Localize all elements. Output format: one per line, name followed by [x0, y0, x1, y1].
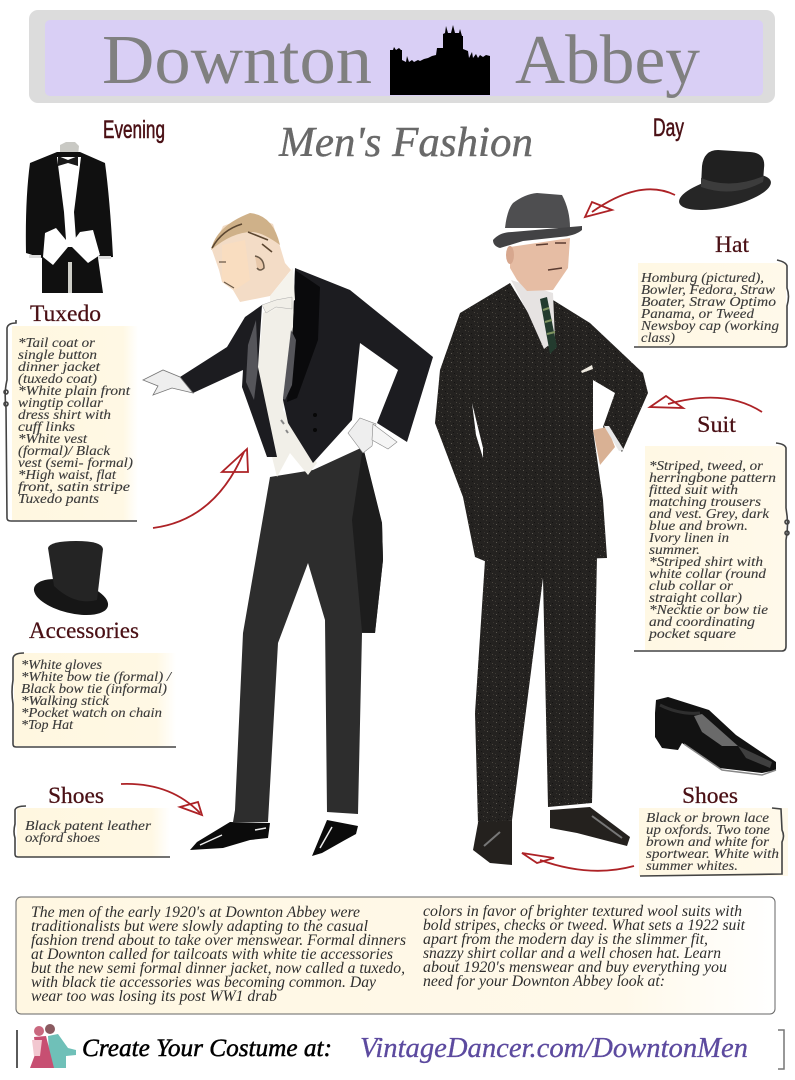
- panel: hat: Homburg (pictured),: [640, 271, 764, 286]
- panel: day shoes: brown and white for: [646, 835, 770, 850]
- panel: accessories: [12, 618, 176, 747]
- trousers and coat tail: [233, 447, 383, 822]
- heading: Evening: Evening: [103, 116, 165, 144]
- panel: accessories: Black bow tie (informal): [21, 682, 167, 697]
- panel: introduction text: [16, 897, 775, 1014]
- shoes: [473, 820, 512, 865]
- footer call to action: Create Your Costume at:: [82, 1035, 332, 1062]
- icon: abbey silhouette: [390, 25, 490, 95]
- image: black oxford shoe: [655, 697, 776, 775]
- panel: hat: Bowler, Fedora, Straw: [641, 283, 776, 298]
- shoes: [190, 822, 270, 850]
- panel: tuxedo: front, satin stripe: [18, 480, 130, 495]
- panel: suit: pocket square: [648, 627, 736, 642]
- collar and bow tie: [270, 268, 295, 312]
- heading: Suit: Suit: [697, 412, 737, 437]
- vest buttons: [281, 420, 288, 433]
- panel: suit: fitted suit with: [649, 483, 738, 498]
- title banner: [29, 10, 775, 103]
- panel: tuxedo: [4, 301, 138, 521]
- panel: evening shoes: Black patent leather: [25, 819, 152, 834]
- panel: tuxedo: vest (semi- formal): [18, 456, 133, 471]
- panel: hat: class): [641, 331, 675, 346]
- panel: tuxedo: dinner jacket: [18, 360, 101, 375]
- footer call to action: VintageDancer.com/DowntonMen: [360, 1032, 748, 1064]
- text column 1: The men of the early 1920's at Downton Abbey were: [31, 904, 360, 921]
- panel: suit: matching trousers: [649, 495, 762, 510]
- panel: day shoes: sportwear. White with: [646, 847, 779, 862]
- panel: suit: white collar (round: [649, 567, 767, 582]
- panel: accessories: *Walking stick: [21, 694, 110, 709]
- image: homburg hat: [676, 150, 774, 217]
- panel: suit: [634, 412, 789, 651]
- panel: tuxedo: (formal)/ Black: [18, 444, 111, 459]
- panel: suit: *Striped shirt with: [649, 555, 763, 570]
- title banner: Downton: [102, 22, 372, 99]
- panel: tuxedo: cuff links: [18, 420, 76, 435]
- panel: accessories: *White bow tie (formal) /: [21, 670, 172, 685]
- panel: tuxedo: dress shirt with: [18, 408, 111, 423]
- panel: accessories: *White gloves: [21, 658, 103, 673]
- panel: suit: club collar or: [649, 579, 734, 594]
- icon: vintage dancers: [30, 1024, 76, 1068]
- panel: accessories: *Top Hat: [21, 718, 74, 733]
- text column 2: snazzy shirt collar and a well chosen hat. Learn: [423, 945, 721, 962]
- image: tailcoat on mannequin: [26, 142, 113, 293]
- text column 2: colors in favor of brighter textured wool suits with: [423, 903, 742, 920]
- panel: tuxedo: *Tail coat or: [18, 336, 96, 351]
- panel: evening shoes: [14, 783, 170, 857]
- panel: tuxedo: *High waist, flat: [18, 468, 117, 483]
- panel: suit: summer.: [649, 543, 700, 558]
- arrow: shoes to day man: [522, 853, 634, 871]
- text column 2: apart from the modern day is the slimmer fit,: [423, 931, 708, 948]
- arrow: tuxedo to evening man: [153, 449, 248, 528]
- panel: suit: straight collar): [649, 591, 742, 606]
- arrow: suit to day man: [650, 396, 762, 412]
- panel: accessories: *Pocket watch on chain: [21, 706, 162, 721]
- heading: Day: Day: [653, 114, 684, 142]
- text column 1: at Downton called for tailcoats with white tie accessories: [31, 946, 393, 963]
- panel: suit: blue and brown.: [649, 519, 748, 534]
- panel: suit: Ivory linen in: [648, 531, 729, 546]
- heading: Accessories: Accessories: [29, 618, 139, 643]
- panel: tuxedo: wingtip collar: [18, 396, 104, 411]
- hand: [593, 427, 615, 465]
- panel: day shoes: summer whites.: [646, 859, 738, 874]
- coat: [283, 268, 433, 463]
- panel: day shoes: Black or brown lace: [646, 811, 769, 826]
- panel: tuxedo: single button: [18, 348, 97, 363]
- panel: hat: Newsboy cap (working: [640, 319, 779, 334]
- text column 1: wear too was losing its post WW1 drab: [31, 988, 277, 1005]
- pocket square: [581, 365, 593, 373]
- panel: suit: *Striped, tweed, or: [649, 459, 764, 474]
- arrow: accessories shoes to evening shoes: [121, 784, 202, 815]
- jacket: [435, 283, 648, 562]
- heading: Shoes: Shoes: [682, 783, 738, 808]
- text column 1: [31, 904, 406, 1005]
- panel: suit: and vest. Grey, dark: [649, 507, 770, 522]
- heading: Hat: Hat: [715, 232, 750, 257]
- figure: day man in tweed suit: [435, 193, 648, 865]
- panel: tuxedo: Tuxedo pants: [18, 492, 100, 507]
- text column 2: need for your Downton Abbey look at:: [423, 973, 665, 990]
- panel: day shoes: up oxfords. Two tone: [646, 823, 770, 838]
- shirt and tie: [511, 280, 555, 349]
- hat: [493, 193, 582, 248]
- text column 2: [423, 903, 746, 990]
- panel: suit: *Necktie or bow tie: [649, 603, 768, 618]
- panel: tuxedo: *White plain front: [18, 384, 131, 399]
- arrow: hat to day man: [585, 189, 675, 217]
- heading: Shoes: Shoes: [48, 783, 104, 808]
- face: [510, 238, 570, 291]
- panel: tuxedo: (tuxedo coat): [18, 372, 97, 387]
- panel: tuxedo: *White vest: [18, 432, 88, 447]
- panel: hat: Boater, Straw Optimo: [641, 295, 776, 310]
- footer call to action: [17, 1024, 784, 1069]
- image: top hat: [30, 541, 112, 622]
- panel: day shoes: [639, 783, 788, 876]
- text column 1: fashion trend about to take over menswear. Formal dinners: [31, 932, 406, 949]
- text column 1: with black tie accessories was becoming common. Day: [31, 974, 376, 991]
- heading: Tuxedo: Tuxedo: [30, 301, 101, 326]
- trousers: [475, 556, 597, 824]
- panel: hat: Panama, or Tweed: [640, 307, 755, 322]
- subtitle: Men's Fashion: Men's Fashion: [278, 120, 533, 166]
- panel: suit: and coordinating: [649, 615, 755, 630]
- text column 2: bold stripes, checks or tweed. What sets a 1922 suit: [423, 917, 746, 934]
- panel: evening shoes: oxford shoes: [25, 831, 101, 846]
- text column 1: but the new semi formal dinner jacket, now called a tuxedo,: [31, 960, 405, 977]
- panel: suit: herringbone pattern: [649, 471, 776, 486]
- white gloves: [143, 370, 193, 395]
- text column 1: traditionalists but were slowly adapting to the casual: [31, 918, 368, 935]
- figure: evening man in tailcoat: [143, 213, 433, 856]
- text column 2: about 1920's menswear and buy everything you: [423, 959, 727, 976]
- neck and head: [212, 216, 291, 302]
- title banner: Abbey: [515, 22, 700, 99]
- shirt and vest: [258, 290, 317, 477]
- panel: hat: [634, 232, 788, 347]
